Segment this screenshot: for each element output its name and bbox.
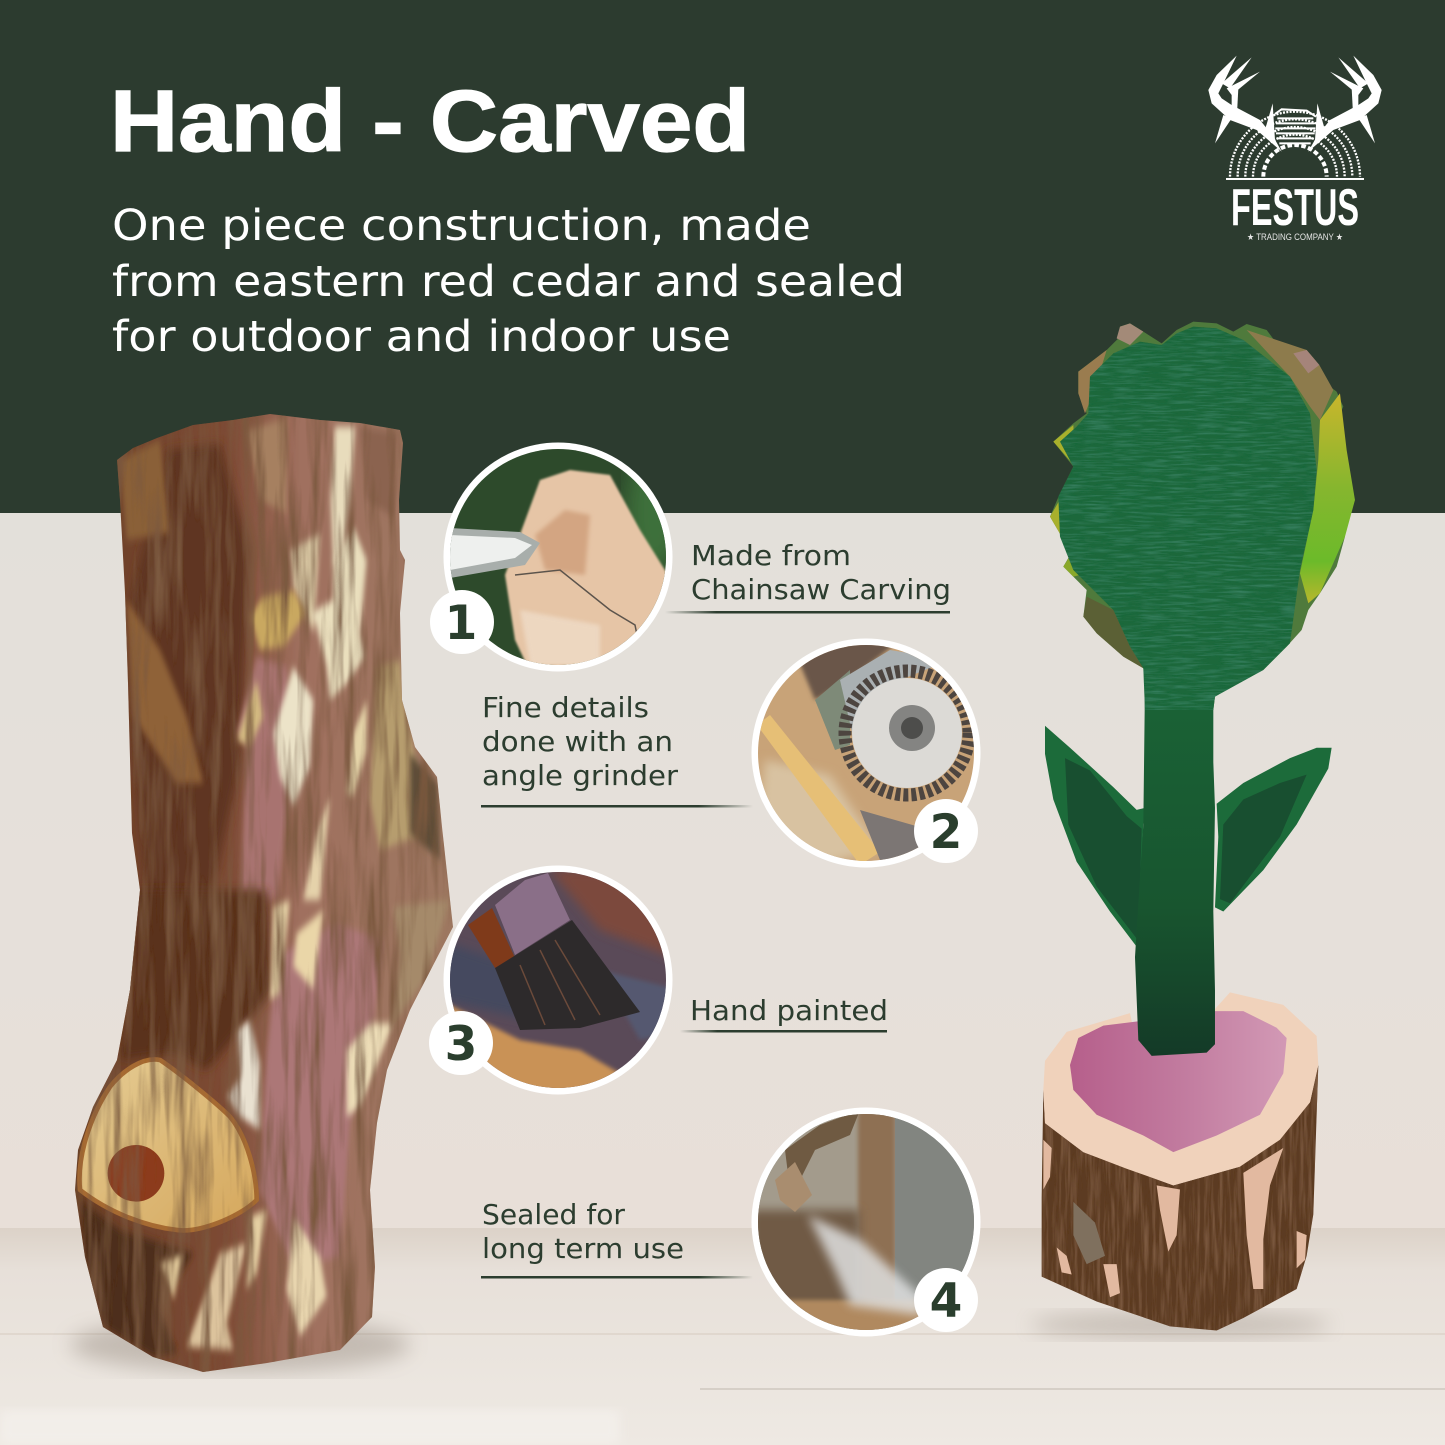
stump heartwood <box>1070 1011 1287 1152</box>
background: wall <box>0 513 1445 1238</box>
flower head edge <box>1050 322 1355 710</box>
background: floor <box>0 1228 1445 1445</box>
subtitle <box>112 201 905 362</box>
bark patches <box>80 418 450 1357</box>
stump bark <box>1042 1065 1318 1330</box>
wordmark: FESTUS <box>1231 179 1359 237</box>
step 3 image <box>440 865 680 1100</box>
left leaf <box>1045 726 1145 949</box>
cedar log <box>75 414 453 1372</box>
step 2 caption: done with an <box>482 725 673 758</box>
lower-left brown <box>1083 597 1143 668</box>
step 1 image <box>444 442 672 672</box>
step 1 caption: Chainsaw Carving <box>691 573 951 606</box>
step 2 number badge: 2 <box>930 805 962 860</box>
step 1 number badge: 1 <box>445 596 477 651</box>
top-right tan band <box>1247 330 1333 420</box>
knot heartwood <box>108 1145 164 1202</box>
step 1 caption <box>665 539 951 614</box>
subtitle: from eastern red cedar and sealed <box>112 257 905 307</box>
right leaf <box>1215 748 1332 912</box>
stem <box>1135 683 1215 1056</box>
step 2 caption: angle grinder <box>482 759 679 792</box>
flower head dark face <box>1058 327 1317 710</box>
step 4 caption <box>481 1198 753 1278</box>
step 1 caption: Made from <box>691 539 851 572</box>
log floor shadow <box>70 1317 410 1373</box>
tagline: ★ TRADING COMPANY ★ <box>1247 232 1343 242</box>
step 4 number badge: 4 <box>930 1274 962 1329</box>
title: Hand - Carved <box>110 73 750 170</box>
step 3 caption: Hand painted <box>690 994 888 1027</box>
step 2 number badge <box>914 799 978 863</box>
step 4 caption: long term use <box>482 1232 684 1265</box>
branch knot <box>79 1059 257 1230</box>
step 3 number badge <box>429 1011 493 1075</box>
log body <box>75 414 453 1372</box>
step 2 image <box>750 638 985 875</box>
step 4 number badge <box>914 1268 978 1332</box>
step 4 image <box>750 1108 985 1345</box>
carved plant <box>1042 322 1355 1330</box>
stump light patches <box>1043 1140 1307 1297</box>
icon: tree-ring stump <box>1226 109 1364 180</box>
stump shadow <box>1030 1311 1330 1339</box>
logo: Festus Trading Company <box>1208 56 1382 242</box>
subtitle: for outdoor and indoor use <box>112 312 731 362</box>
stump top rings <box>1043 992 1318 1185</box>
header band <box>0 0 1445 513</box>
subtitle: One piece construction, made <box>112 201 811 251</box>
icon: left antler <box>1208 56 1282 152</box>
step 2 caption <box>481 691 753 808</box>
step 2 caption: Fine details <box>482 691 649 724</box>
left yellow tips <box>1053 425 1075 467</box>
step 4 caption: Sealed for <box>482 1198 625 1231</box>
step 1 number badge <box>430 590 494 654</box>
lime side <box>1300 393 1355 603</box>
step 3 number badge: 3 <box>445 1017 477 1072</box>
icon: right antler <box>1308 56 1382 152</box>
